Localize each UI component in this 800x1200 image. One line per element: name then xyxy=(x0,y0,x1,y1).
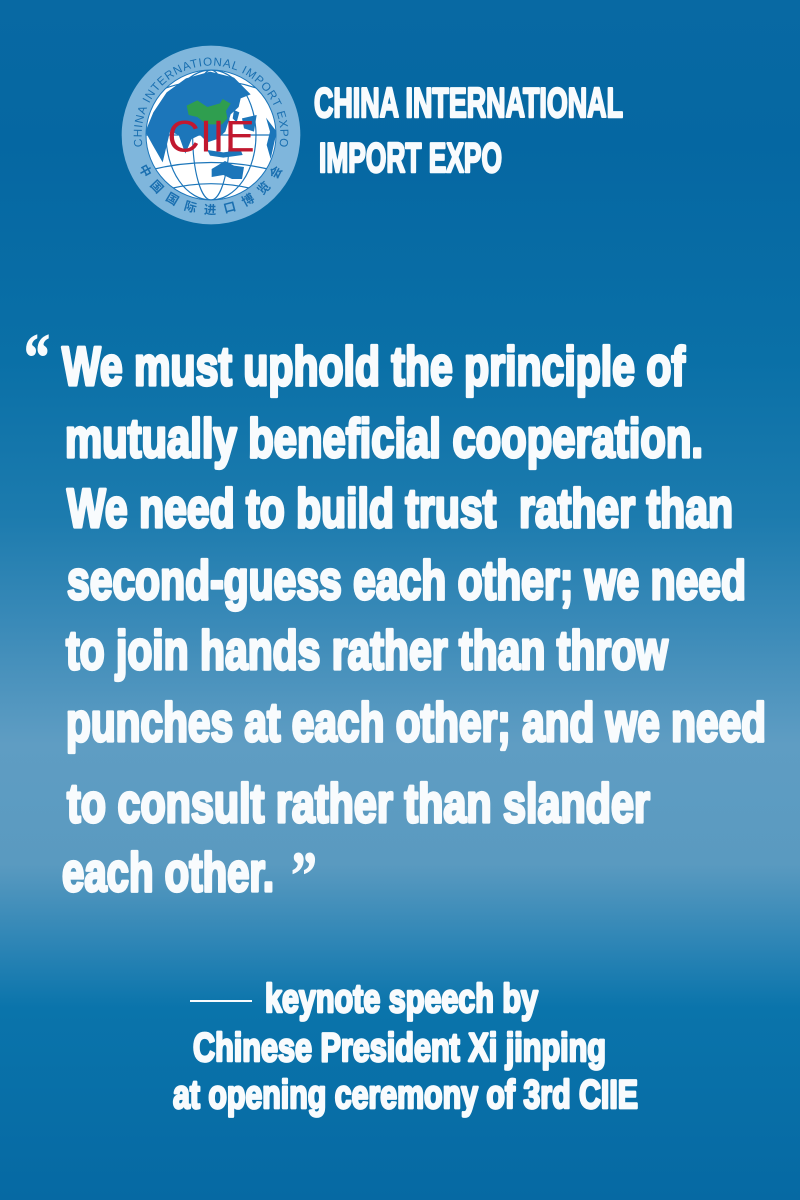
logo CIIE wordmark: CIIE xyxy=(167,113,255,162)
heading: expo name xyxy=(314,79,623,181)
closing quotation mark: ” xyxy=(291,837,317,913)
attribution line 1: keynote speech by xyxy=(265,977,539,1021)
logo ring text: Chinese: 中国国际进口博览会 xyxy=(140,164,282,215)
globe with continents xyxy=(145,70,277,200)
attribution dash xyxy=(190,1000,252,1002)
heading line 2: IMPORT EXPO xyxy=(319,134,502,181)
quote line 8: each other. xyxy=(62,841,274,903)
icon: CIIE globe logo xyxy=(122,46,300,224)
logo outer ring xyxy=(122,46,300,224)
opening quotation mark: “ xyxy=(24,319,50,395)
logo ring text: English: CHINA INTERNATIONAL IMPORT EXPO xyxy=(134,58,288,147)
attribution line 3: at opening ceremony of 3rd CIIE xyxy=(173,1073,638,1117)
heading line 1: CHINA INTERNATIONAL xyxy=(314,79,623,126)
attribution block xyxy=(173,977,638,1117)
attribution line 2: Chinese President Xi jinping xyxy=(193,1026,606,1070)
China in green xyxy=(187,99,231,124)
logo globe outline xyxy=(146,70,276,200)
quote text block xyxy=(62,335,766,903)
